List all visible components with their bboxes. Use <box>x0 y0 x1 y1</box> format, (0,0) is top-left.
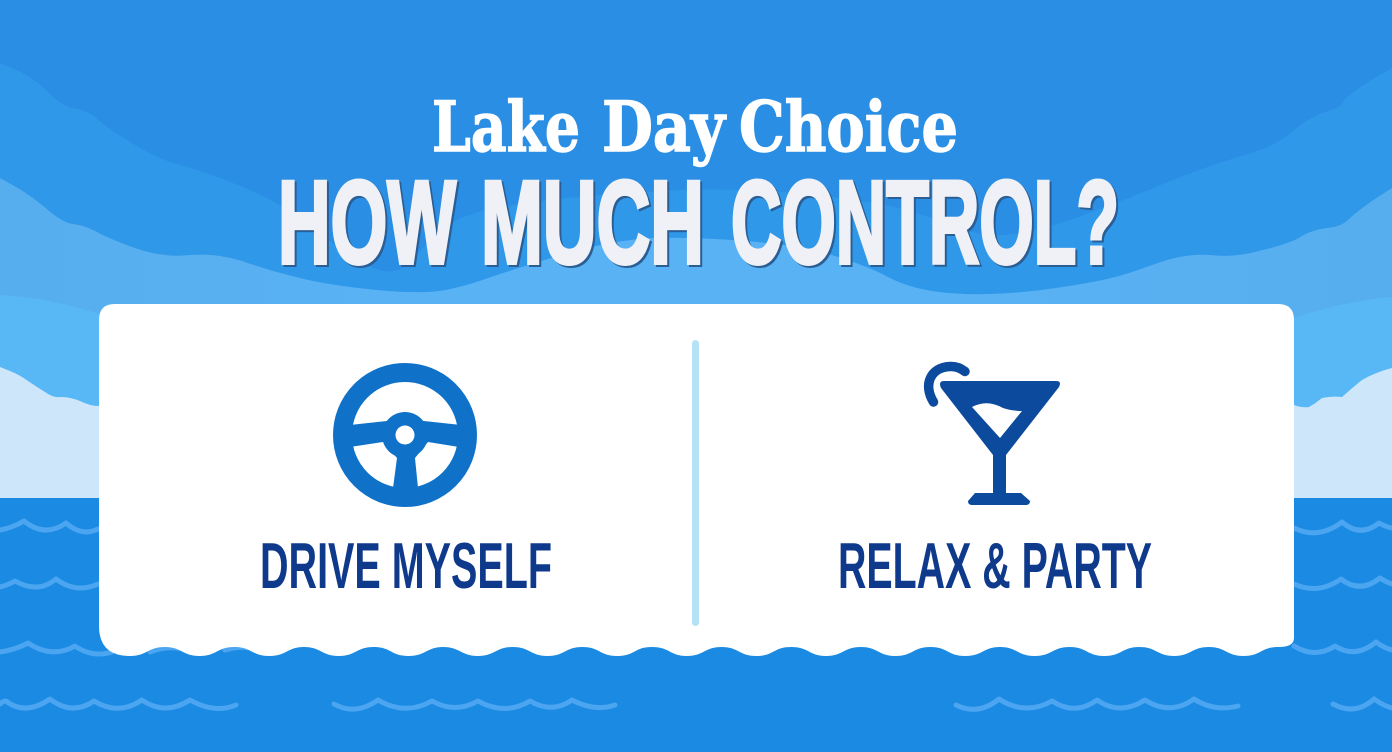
icon: cocktail glass <box>929 366 1060 505</box>
title line: Lake Day Choice: Lake <box>432 87 580 168</box>
label: drive myself: DRIVE MYSELF <box>260 529 552 602</box>
white choice panel with wavy bottom <box>99 304 1294 656</box>
label: relax and party: RELAX & PARTY <box>838 529 1152 602</box>
middle cloud layer <box>0 178 1392 752</box>
water ripples <box>0 521 1392 709</box>
title <box>278 87 1119 289</box>
lake water <box>0 498 1392 752</box>
icon: steering wheel <box>342 372 468 498</box>
title line: Lake Day Choice: Choice <box>739 87 958 168</box>
center divider <box>692 340 699 626</box>
title line: Lake Day Choice: Day <box>602 87 727 168</box>
title line: How much control: HOW <box>278 157 456 289</box>
title line: How much control <box>278 157 1119 289</box>
near cloud layer <box>0 295 1392 752</box>
title line: Lake Day Choice <box>432 87 958 168</box>
pale horizon clouds <box>0 367 1392 752</box>
title line: How much control: MUCH <box>481 157 704 289</box>
title line: How much control: CONTROL? <box>731 157 1119 289</box>
